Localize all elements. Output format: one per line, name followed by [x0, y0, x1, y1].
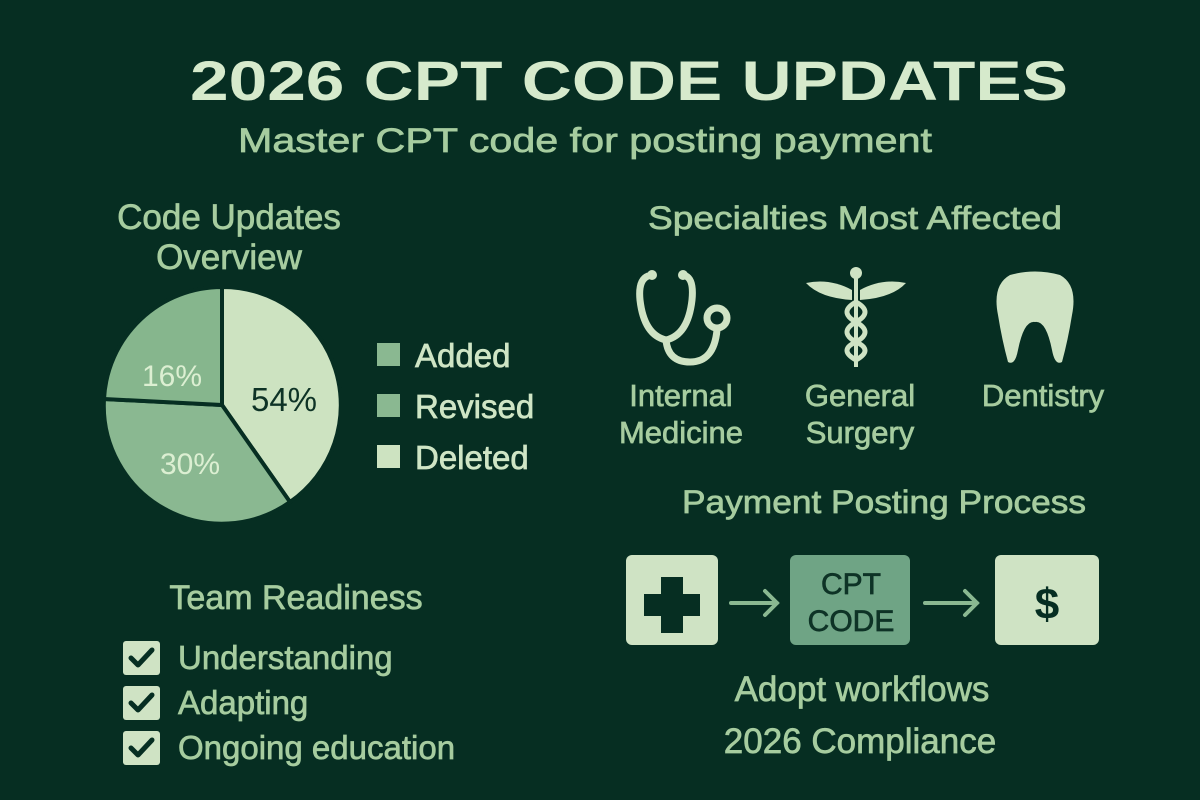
closing text: 2026 Compliance: [724, 722, 996, 761]
legend: [377, 337, 534, 476]
pie chart: 54%: [251, 381, 317, 418]
icon: caduceus: [806, 267, 906, 367]
heading: payment posting process: Payment Posting Process: [682, 484, 1086, 520]
pie chart: [104, 287, 341, 524]
closing text: [724, 670, 996, 761]
process: CPT code box: [790, 555, 910, 645]
checklist: Understanding: [178, 639, 393, 676]
pie chart: 16%: [142, 360, 202, 393]
legend: Revised: [415, 388, 534, 425]
specialty labels: Internal: [629, 378, 733, 413]
specialty labels: General: [805, 378, 915, 413]
checklist: Adapting: [178, 684, 308, 721]
specialty labels: [619, 378, 1105, 450]
process: CPT code box: CPT: [821, 568, 881, 601]
heading: specialties: Specialties Most Affected: [648, 200, 1062, 236]
title: 2026 CPT CODE UPDATES: [190, 49, 1068, 112]
arrow 2: [925, 591, 977, 615]
specialty labels: Surgery: [806, 415, 915, 450]
pie chart: 30%: [160, 448, 220, 481]
process: dollar box: $: [1035, 580, 1059, 629]
heading: code updates overview: Code Updates: [117, 198, 341, 237]
heading: code updates overview: [117, 198, 341, 277]
checklist: [123, 639, 455, 766]
specialty labels: Dentistry: [982, 378, 1105, 413]
specialty labels: Medicine: [619, 415, 743, 450]
process: cross box: [626, 555, 718, 645]
icon: tooth: [996, 272, 1074, 363]
process: dollar box: [995, 555, 1099, 645]
checklist: Ongoing education: [178, 729, 455, 766]
closing text: Adopt workflows: [735, 670, 989, 709]
arrow 1: [731, 591, 777, 615]
legend: Added: [415, 337, 510, 374]
legend: Deleted: [415, 439, 529, 476]
heading: team readiness: Team Readiness: [169, 579, 423, 617]
subtitle: Master CPT code for posting payment: [238, 122, 933, 160]
heading: code updates overview: Overview: [156, 238, 303, 277]
icon: stethoscope: [640, 270, 727, 362]
process: CPT code box: CODE: [808, 605, 894, 638]
